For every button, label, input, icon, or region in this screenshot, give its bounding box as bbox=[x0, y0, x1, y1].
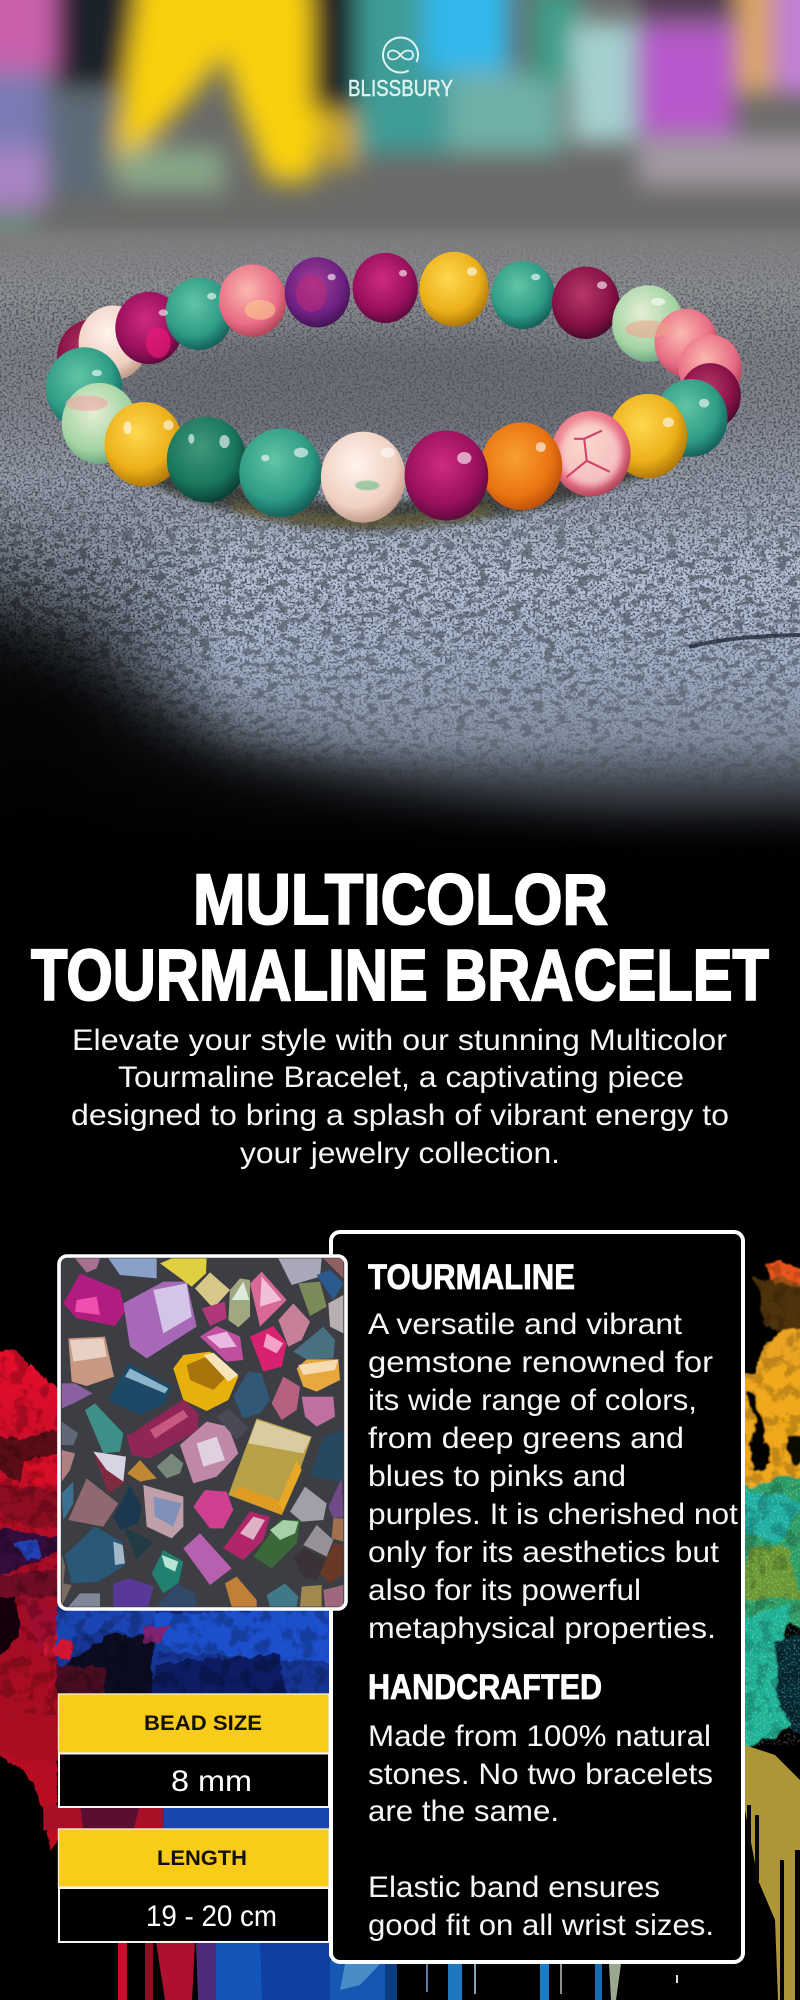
spec: length: LENGTH bbox=[157, 1846, 247, 1870]
spec: bead size: BEAD SIZE bbox=[144, 1711, 262, 1735]
front row of beads bbox=[62, 379, 728, 523]
title: MULTICOLOR bbox=[193, 861, 608, 940]
tourmaline description: metaphysical properties. bbox=[368, 1612, 716, 1645]
paint splash: right side bbox=[735, 1264, 800, 2000]
intro paragraph: designed to bring a splash of vibrant energy to bbox=[71, 1099, 729, 1132]
handcrafted description: stones. No two bracelets bbox=[368, 1758, 713, 1791]
brand logo: BLISSBURY bbox=[348, 75, 453, 101]
splash between table rows bbox=[43, 1805, 330, 1830]
handcrafted description: Made from 100% natural bbox=[368, 1720, 711, 1753]
crack line bbox=[689, 635, 800, 647]
coarse cracks texture bbox=[0, 460, 800, 778]
bead highlights bbox=[92, 267, 709, 464]
paint splash: left red and blue bbox=[0, 1348, 333, 1851]
gemstones photo bbox=[59, 1256, 346, 1609]
spec: bead size: 8 mm bbox=[171, 1765, 252, 1798]
stone surface inside bracelet bbox=[105, 333, 685, 457]
tourmaline description: blues to pinks and bbox=[368, 1460, 626, 1493]
handcrafted description bbox=[368, 1720, 714, 1942]
brand logo bbox=[349, 36, 453, 96]
title bbox=[31, 861, 769, 1016]
shadow under bracelet bbox=[101, 456, 685, 536]
panel left edge over specs bbox=[329, 1611, 333, 1956]
text panel bbox=[331, 1232, 743, 1962]
handcrafted description: Elastic band ensures bbox=[368, 1871, 660, 1904]
tourmaline description: only for its aesthetics but bbox=[368, 1536, 719, 1569]
tourmaline description: A versatile and vibrant bbox=[368, 1308, 682, 1341]
back row of beads bbox=[46, 252, 742, 429]
handcrafted description: good fit on all wrist sizes. bbox=[368, 1909, 714, 1942]
intro paragraph: Tourmaline Bracelet, a captivating piece bbox=[118, 1061, 684, 1094]
spec: length: 19 - 20 cm bbox=[146, 1900, 277, 1933]
tourmaline description: from deep greens and bbox=[368, 1422, 684, 1455]
concrete block bbox=[0, 228, 800, 838]
handcrafted description: are the same. bbox=[368, 1795, 559, 1828]
intro paragraph: your jewelry collection. bbox=[240, 1137, 560, 1170]
panel heading: tourmaline: TOURMALINE bbox=[368, 1258, 575, 1297]
intro paragraph: Elevate your style with our stunning Multicolor bbox=[72, 1024, 727, 1057]
blue splash between photo and table bbox=[43, 1605, 333, 1698]
paint texture on right splash bbox=[745, 1262, 800, 1745]
tourmaline description: also for its powerful bbox=[368, 1574, 641, 1607]
spec: bead size bbox=[58, 1694, 329, 1807]
paint mottling on left splash bbox=[0, 1345, 329, 1715]
right drips bbox=[745, 1745, 800, 2000]
intro paragraph bbox=[71, 1024, 729, 1170]
speckle texture bbox=[0, 248, 800, 780]
tourmaline description: purples. It is cherished not bbox=[368, 1498, 738, 1531]
tourmaline description: its wide range of colors, bbox=[368, 1384, 697, 1417]
beads bracelet bbox=[46, 252, 742, 523]
tourmaline description bbox=[368, 1308, 738, 1645]
hero photo: bracelet on concrete bbox=[0, 0, 800, 920]
spec: length bbox=[58, 1829, 329, 1942]
paint drips along bottom bbox=[118, 1942, 678, 2000]
bead colour marbling bbox=[65, 275, 671, 490]
dark corner and fade bbox=[0, 608, 800, 842]
blurred graffiti background bbox=[0, 0, 800, 240]
panel heading: handcrafted: HANDCRAFTED bbox=[368, 1668, 602, 1707]
tourmaline description: gemstone renowned for bbox=[368, 1346, 713, 1379]
